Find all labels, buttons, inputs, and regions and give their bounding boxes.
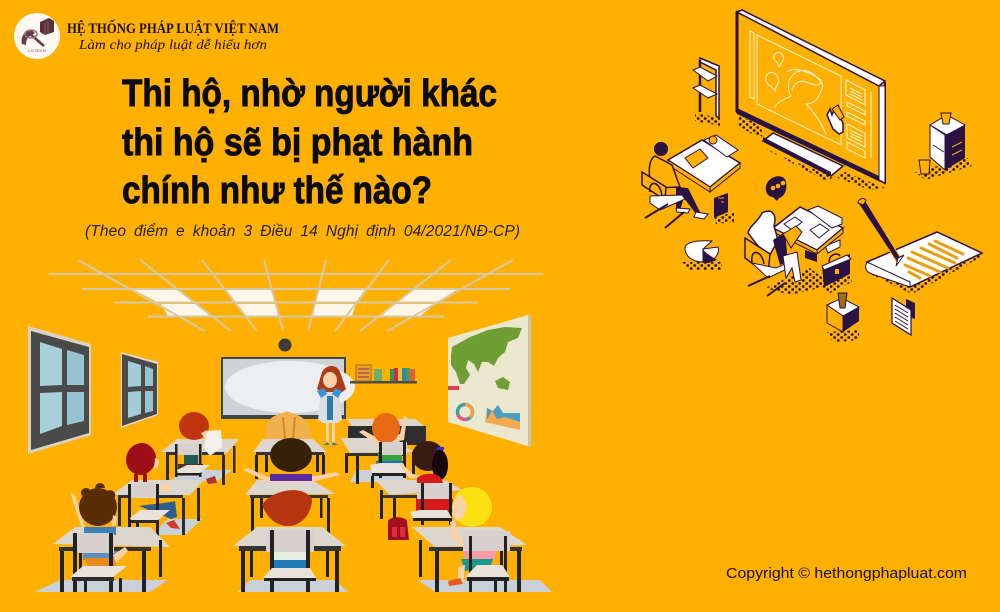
right column desks and students: [341, 413, 552, 592]
front left student: [35, 483, 170, 592]
brand tagline: Làm cho pháp luật dễ hiểu hơn: [78, 38, 267, 53]
title: thi hộ sẽ bị phạt hành: [122, 122, 473, 164]
back left student: [161, 412, 239, 485]
teacher: [317, 366, 346, 445]
woman at desk: [745, 206, 843, 296]
brand name: HỆ THỐNG PHÁP LUẬT VIỆT NAM: [67, 19, 279, 37]
orange-haired student: [341, 413, 427, 488]
classroom illustration: [28, 260, 552, 592]
briefcase: [820, 254, 852, 294]
pie chart: [682, 241, 722, 270]
speech bubble: [766, 176, 786, 201]
whiteboard: [221, 357, 355, 419]
middle student with dark hair: [243, 438, 340, 534]
copyright: Copyright © hethongphapluat.com: [726, 565, 967, 582]
wall map: [448, 315, 531, 447]
book: [714, 193, 734, 224]
bookshelf: [350, 365, 417, 384]
middle left student: [112, 443, 204, 546]
title: chính như thế nào?: [122, 170, 432, 212]
middle column desks and students: [233, 412, 348, 592]
red backpack: [388, 517, 409, 540]
left window: [28, 326, 91, 454]
isometric online learning illustration: [642, 10, 985, 342]
back middle student: [253, 412, 327, 479]
logo: LO TECH: [28, 48, 46, 53]
wall shelf: [693, 58, 720, 126]
ceiling lights: [49, 260, 543, 331]
pencil and paper: [858, 199, 985, 294]
clock: [278, 338, 292, 352]
title: Thi hộ, nhờ người khác: [122, 73, 497, 115]
cup on box: [827, 293, 860, 342]
man at desk: [642, 135, 740, 228]
logo: [14, 13, 60, 59]
title: [122, 73, 497, 212]
blonde student: [412, 487, 552, 592]
legal citation subtitle: (Theo điểm e khoản 3 Điều 14 Nghị định 04/2021/NĐ-CP): [85, 223, 520, 240]
large monitor: [737, 10, 885, 190]
cabinet with cup: [915, 113, 972, 180]
front middle student: [233, 490, 348, 592]
ponytail student: [375, 441, 462, 525]
right window: [121, 352, 158, 428]
left column desks and students: [35, 412, 239, 592]
document: [892, 298, 915, 335]
